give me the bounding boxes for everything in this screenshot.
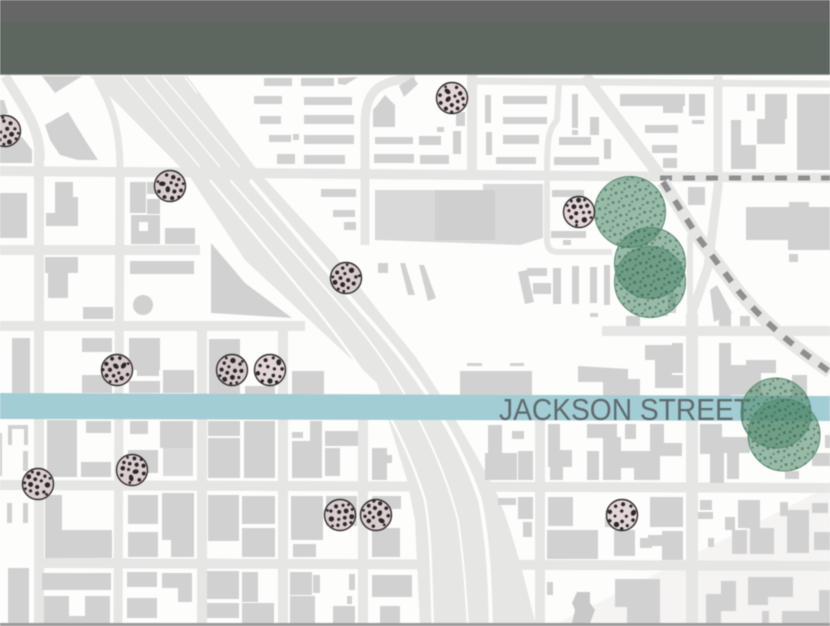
lower right shaded district bbox=[552, 486, 830, 626]
speckled marker bbox=[97, 351, 135, 389]
green tree cluster: Jackson Street bbox=[741, 378, 820, 471]
speckled marker bbox=[254, 354, 286, 386]
street label: JACKSON STREET bbox=[499, 392, 751, 427]
highlighted street band: Jackson Street bbox=[0, 393, 830, 421]
freeway bbox=[90, 76, 536, 626]
speckled marker bbox=[0, 116, 20, 146]
green tree cluster: north bbox=[594, 176, 686, 318]
speckled marker bbox=[212, 350, 252, 390]
speckled marker bbox=[320, 495, 360, 535]
speckled marker bbox=[357, 496, 394, 532]
rail corridor dashed line bbox=[660, 178, 830, 372]
speckled marker bbox=[561, 194, 597, 230]
header bar bbox=[0, 0, 830, 75]
speckled marker bbox=[603, 496, 641, 534]
speckled marker bbox=[330, 262, 362, 294]
speckled marker bbox=[433, 80, 471, 118]
speckled marker bbox=[154, 170, 186, 202]
bottom edge bbox=[0, 623, 830, 626]
speckled marker bbox=[18, 464, 58, 504]
speckled marker bbox=[116, 453, 148, 486]
